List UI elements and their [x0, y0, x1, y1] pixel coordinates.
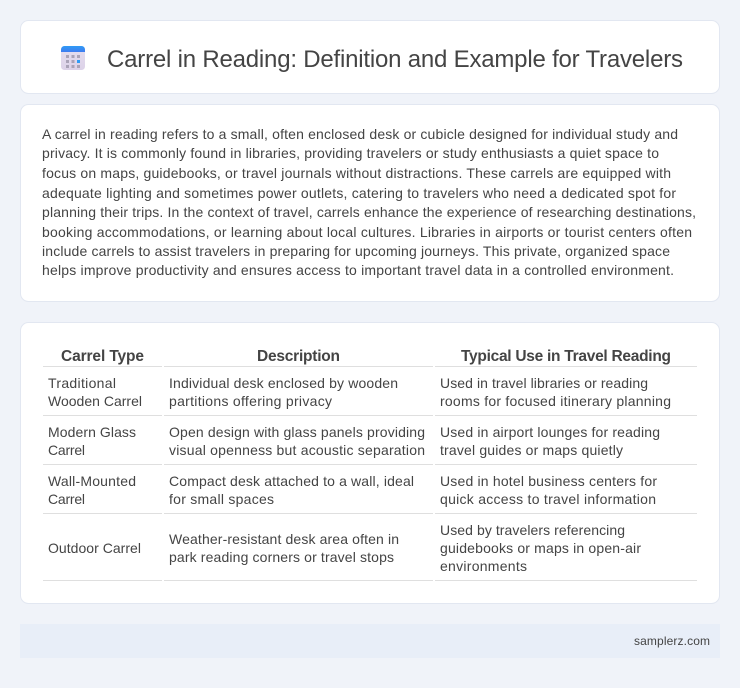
text block: definition paragraph: booking accommodations, or learning about local cultures. Libraries in airports or tourist centers often — [42, 224, 692, 240]
table row: outdoor carrel: Outdoor Carrel — [48, 540, 141, 556]
table row: wall-mounted carrel: for small spaces — [169, 491, 274, 507]
text block: definition paragraph: privacy. It is commonly found in libraries, providing travelers or study enthusiasts a quiet space to — [42, 145, 659, 161]
table row: outdoor carrel: park reading corners or travel stops — [169, 549, 394, 565]
table row: modern glass carrel: Used in airport lounges for reading — [440, 424, 660, 440]
footer — [20, 624, 720, 658]
table row: wall-mounted carrel: Compact desk attached to a wall, ideal — [169, 473, 414, 489]
table row: outdoor carrel — [48, 522, 641, 574]
table row: traditional wooden carrel: Wooden Carrel — [48, 393, 142, 409]
table header: Description — [257, 348, 340, 365]
panel: title header — [20, 20, 720, 94]
table row: traditional wooden carrel: Used in travel libraries or reading — [440, 375, 648, 391]
text block: definition paragraph: A carrel in reading refers to a small, often enclosed desk or cubicle designed for individual study and — [42, 126, 678, 142]
panel: introduction — [20, 104, 720, 302]
table row: modern glass carrel: travel guides or maps quietly — [440, 442, 623, 458]
table row: modern glass carrel: visual openness but acoustic separation — [169, 442, 425, 458]
table row: modern glass carrel: Open design with glass panels providing — [169, 424, 425, 440]
table header — [61, 348, 671, 365]
text block: definition paragraph — [42, 126, 696, 278]
title: Carrel in Reading: Definition and Example for Travelers — [107, 46, 683, 73]
footer source label: samplerz.com — [634, 634, 710, 648]
icon: calendar — [61, 46, 85, 70]
table row: traditional wooden carrel — [48, 375, 671, 409]
table row: outdoor carrel: guidebooks or maps in open-air — [440, 540, 641, 556]
table row: modern glass carrel: Carrel — [48, 442, 85, 458]
table row: modern glass carrel — [48, 424, 660, 458]
table row: wall-mounted carrel: quick access to travel information — [440, 491, 656, 507]
table row: wall-mounted carrel: Wall-Mounted — [48, 473, 136, 489]
table header: Carrel Type — [61, 348, 144, 365]
table row: modern glass carrel: Modern Glass — [48, 424, 136, 440]
table row: wall-mounted carrel: Used in hotel business centers for — [440, 473, 657, 489]
panel: carrel types table — [20, 322, 720, 604]
table row: outdoor carrel: Weather-resistant desk area often in — [169, 531, 399, 547]
table row: traditional wooden carrel: partitions offering privacy — [169, 393, 332, 409]
table row: traditional wooden carrel: rooms for focused itinerary planning — [440, 393, 671, 409]
text block: definition paragraph: include carrels to assist travelers in preparing for upcoming journeys. This private, organized space — [42, 243, 670, 259]
text block: definition paragraph: focus on maps, guidebooks, or travel journals without distractions. These carrels are equipped with — [42, 165, 671, 181]
text block: definition paragraph: planning their trips. In the context of travel, carrels enhance the experience of researching destinations, — [42, 204, 696, 220]
text block: definition paragraph: adequate lighting and sometimes power outlets, catering to travelers who need a dedicated spot for — [42, 185, 676, 201]
table row: traditional wooden carrel: Traditional — [48, 375, 116, 391]
table row: outdoor carrel: environments — [440, 558, 527, 574]
table row: traditional wooden carrel: Individual desk enclosed by wooden — [169, 375, 398, 391]
table header: Typical Use in Travel Reading — [461, 348, 671, 365]
table row: outdoor carrel: Used by travelers referencing — [440, 522, 625, 538]
table row: wall-mounted carrel — [48, 473, 657, 507]
text block: definition paragraph: helps improve productivity and ensures access to important travel data in a controlled environment. — [42, 262, 674, 278]
table row: wall-mounted carrel: Carrel — [48, 491, 85, 507]
